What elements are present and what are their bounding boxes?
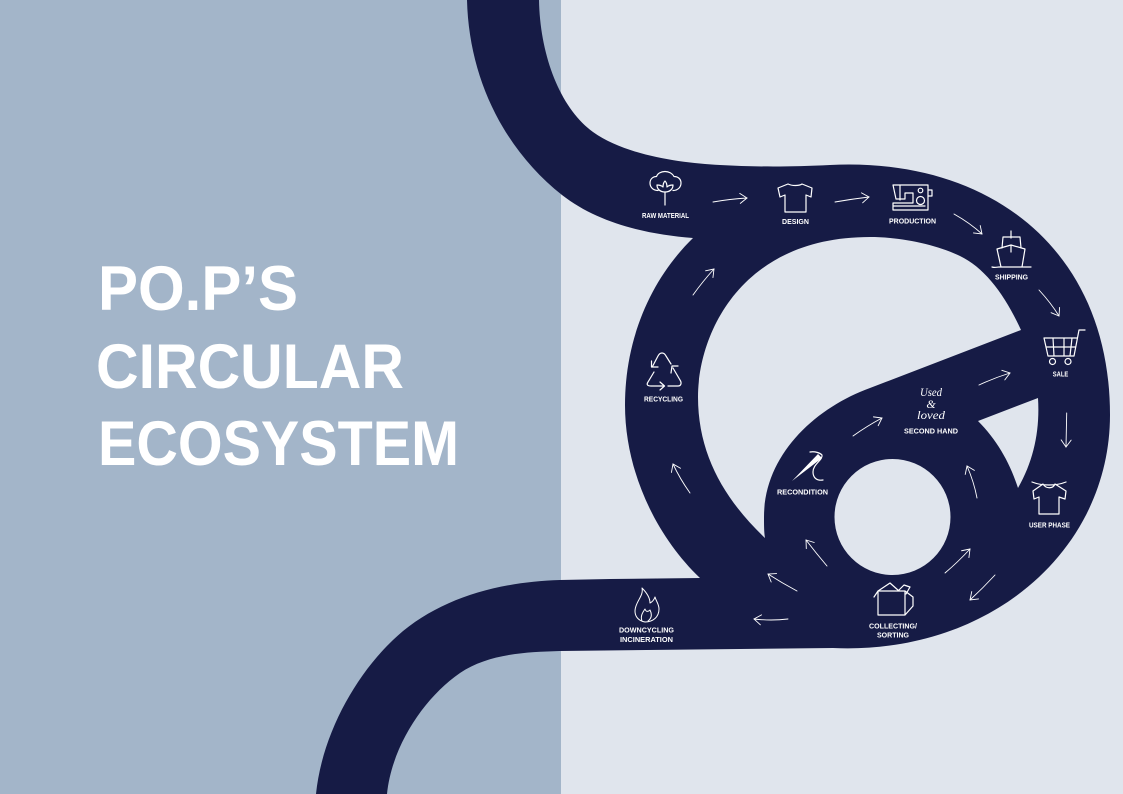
stage: design — [778, 184, 812, 226]
icon: used and loved script — [917, 385, 946, 422]
right background panel — [561, 0, 1123, 794]
icon: shirt on washing line — [1032, 482, 1066, 514]
title: CIRCULAR — [96, 332, 404, 402]
icon: used and loved script: Used — [920, 385, 943, 399]
arrow: inner collecting to second hand — [967, 466, 977, 498]
icon: used and loved script: loved — [917, 408, 946, 422]
icon: flame — [635, 588, 659, 622]
arrow: recondition to second hand — [853, 418, 882, 436]
stage: production: PRODUCTION — [889, 218, 936, 226]
arrow: design to production — [835, 197, 869, 202]
stage: sale: SALE — [1053, 372, 1069, 378]
stage: raw material: RAW MATERIAL — [642, 213, 690, 220]
arrow: collecting to outer loop — [768, 574, 797, 591]
icon: t-shirt — [778, 184, 812, 212]
stage: raw material — [642, 172, 690, 220]
icon: recycling triangle — [647, 353, 681, 390]
icon: ship — [992, 231, 1031, 267]
arrow: sale to user phase — [1065, 413, 1068, 447]
title: ECOSYSTEM — [98, 409, 459, 479]
arrow: raw material to design — [713, 198, 747, 202]
stage: shipping: SHIPPING — [995, 274, 1029, 282]
arrow: production to shipping — [954, 214, 982, 234]
stage: production — [889, 185, 936, 226]
stage: downcycling and incineration — [619, 588, 675, 644]
arrow: shipping to sale — [1039, 290, 1059, 316]
icon: shopping cart — [1044, 330, 1085, 364]
stage: shipping — [992, 231, 1031, 282]
icon: cotton plant — [650, 172, 681, 205]
arrow: user phase to collecting — [970, 575, 995, 600]
stage: collecting and sorting: COLLECTING/ — [869, 624, 917, 630]
left background panel — [0, 0, 561, 794]
stage: downcycling and incineration: DOWNCYCLING — [619, 628, 675, 634]
circular road ribbon — [316, 0, 1110, 794]
stage: collecting and sorting — [869, 583, 917, 640]
stage: second hand: SECOND HAND — [904, 428, 958, 436]
stage: recycling — [644, 353, 684, 404]
stage: collecting and sorting: SORTING — [877, 632, 910, 640]
title: PO.P’S — [98, 254, 298, 324]
arrow: collecting to downcycling — [754, 619, 788, 620]
stage: recondition — [777, 452, 828, 496]
arrow: collecting to inner loop — [945, 549, 970, 573]
arrow: outer loop to recycling — [673, 464, 690, 493]
stage: user phase: USER PHASE — [1029, 522, 1070, 530]
stage: recondition: RECONDITION — [777, 490, 828, 496]
icon: sewing machine — [893, 185, 932, 210]
title — [96, 254, 459, 479]
arrow: second hand to sale — [979, 373, 1010, 385]
icon: used and loved script: & — [926, 397, 936, 411]
arrow: collecting to recondition — [806, 540, 827, 566]
icon: box — [874, 583, 913, 615]
stage: second hand — [904, 385, 958, 436]
stage: downcycling and incineration: INCINERATION — [620, 637, 673, 644]
stage: recycling: RECYCLING — [644, 396, 684, 404]
stage: sale — [1044, 330, 1085, 378]
stage: user phase — [1029, 482, 1070, 530]
icon: needle and thread — [792, 452, 823, 481]
arrow: recycling to raw material — [693, 269, 714, 295]
stage: design: DESIGN — [782, 219, 809, 226]
